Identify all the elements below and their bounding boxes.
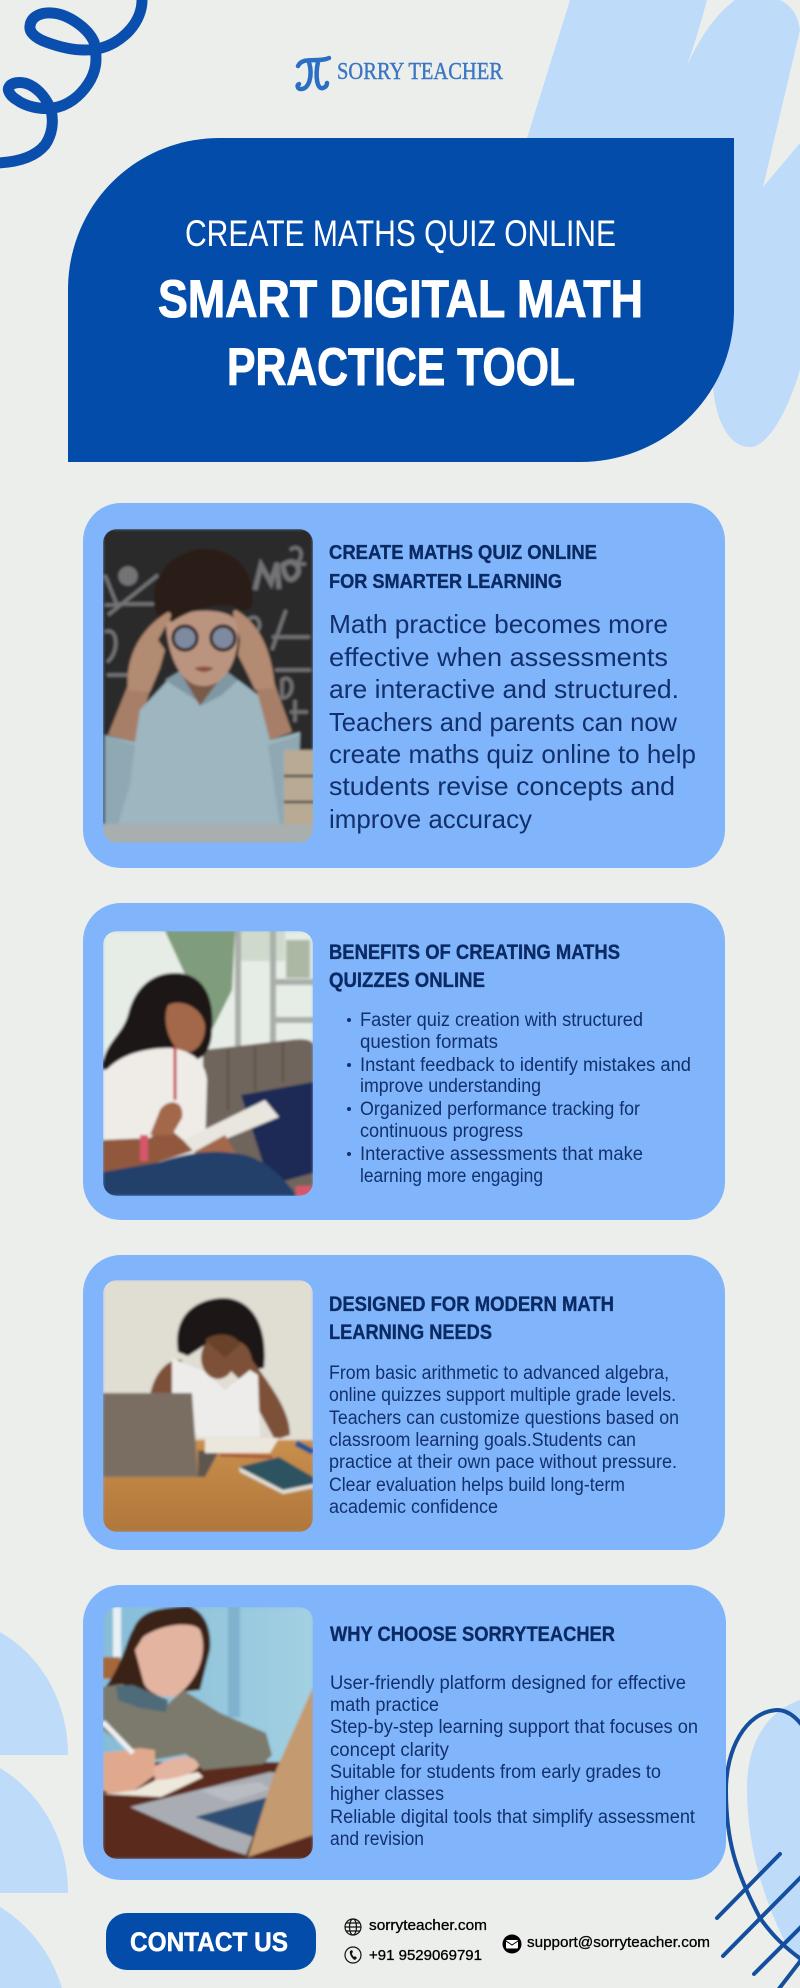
- plant: [165, 931, 235, 1030]
- body text: Math practice becomes more: [329, 609, 668, 639]
- icon: globe: [345, 1919, 361, 1935]
- bullet list: Faster quiz creation with structured: [360, 1010, 643, 1031]
- jeans: [103, 1152, 297, 1196]
- body text: [329, 1363, 679, 1518]
- heading: [329, 1293, 614, 1344]
- hands: [128, 612, 171, 692]
- hero title: PRACTICE TOOL: [227, 338, 575, 397]
- hair: [177, 1298, 265, 1372]
- email: support@sorryteacher.com: [527, 1934, 710, 1951]
- body text: online quizzes support multiple grade levels.: [329, 1385, 676, 1406]
- paper: [103, 1772, 203, 1797]
- laptop: [130, 1772, 277, 1855]
- window frame: [238, 931, 313, 1046]
- heading: [329, 941, 620, 992]
- body text: create maths quiz online to help: [329, 739, 696, 769]
- hands: [103, 1748, 155, 1794]
- contact button: CONTACT US: [130, 1927, 288, 1957]
- body text: Clear evaluation helps build long-term: [329, 1475, 625, 1496]
- icon: mail: [502, 1934, 522, 1954]
- bullet list: learning more engaging: [360, 1166, 543, 1187]
- notebook: [183, 1100, 279, 1152]
- logo wordmark: SORRY TEACHER: [337, 59, 503, 85]
- bullet list: [347, 1010, 691, 1187]
- body text: effective when assessments: [329, 642, 668, 672]
- panel: why choose sorryteacher: [83, 1585, 726, 1880]
- bullet list: Interactive assessments that make: [360, 1144, 643, 1165]
- body text: Teachers and parents can now: [329, 707, 677, 737]
- photo: girl with notebook: [103, 931, 313, 1196]
- heading: CREATE MATHS QUIZ ONLINE: [329, 542, 597, 564]
- body text: math practice: [330, 1695, 439, 1716]
- heading: DESIGNED FOR MODERN MATH: [329, 1293, 614, 1316]
- bullet list: Instant feedback to identify mistakes and: [360, 1055, 691, 1076]
- arms: [150, 1360, 182, 1400]
- website: sorryteacher.com: [369, 1917, 487, 1934]
- body text: [329, 609, 696, 834]
- table: [103, 1440, 313, 1532]
- neck: [182, 675, 218, 706]
- heading: QUIZZES ONLINE: [329, 969, 485, 992]
- hero subtitle: CREATE MATHS QUIZ ONLINE: [185, 213, 616, 254]
- photo: boy at chalkboard: [103, 529, 314, 843]
- hero banner: [68, 138, 734, 462]
- table: [103, 1762, 313, 1859]
- decorative shape: bottom right: [717, 1700, 800, 1988]
- icon: phone: [345, 1947, 361, 1963]
- body text: User-friendly platform designed for effective: [330, 1673, 686, 1694]
- bullet list: Organized performance tracking for: [360, 1099, 641, 1120]
- body text: Teachers can customize questions based on: [329, 1408, 679, 1429]
- pillow: [241, 1082, 313, 1185]
- books: [284, 750, 314, 828]
- screen back: [248, 1687, 313, 1857]
- body text: improve accuracy: [329, 804, 532, 834]
- body text: concept clarity: [330, 1740, 449, 1761]
- logo icon: pi: [298, 58, 329, 89]
- arm: [103, 1131, 194, 1174]
- chalk formulas: [105, 548, 311, 722]
- face: [201, 1337, 235, 1379]
- heading: BENEFITS OF CREATING MATHS: [329, 941, 620, 964]
- contact button: [106, 1913, 316, 1970]
- bullet list: question formats: [360, 1032, 498, 1053]
- heading: LEARNING NEEDS: [329, 1321, 492, 1344]
- hero title: SMART DIGITAL MATH: [158, 270, 643, 329]
- heading: FOR SMARTER LEARNING: [329, 571, 562, 593]
- logo: [298, 58, 503, 89]
- top: [105, 1045, 209, 1138]
- photo: student at laptop: [103, 1280, 313, 1532]
- body text: Suitable for students from early grades to: [330, 1762, 661, 1783]
- sofa: [203, 1039, 313, 1196]
- body text: are interactive and structured.: [329, 674, 679, 704]
- glasses: [173, 626, 235, 650]
- heading: WHY CHOOSE SORRYTEACHER: [330, 1623, 615, 1646]
- body text: [330, 1673, 698, 1850]
- body text: practice at their own pace without pressure.: [329, 1452, 677, 1473]
- sweater: [103, 1684, 272, 1770]
- hero title: [158, 270, 643, 397]
- body text: From basic arithmetic to advanced algebra,: [329, 1363, 669, 1384]
- hair: [103, 1607, 210, 1695]
- notebook: [205, 1438, 279, 1453]
- face: [135, 1625, 203, 1697]
- body text: higher classes: [330, 1784, 444, 1805]
- shirt: [105, 680, 300, 825]
- bullet list: improve understanding: [360, 1076, 541, 1097]
- photo: girl writing: [103, 1607, 313, 1859]
- decorative spiral: top left: [0, 0, 142, 163]
- laptop: [103, 1393, 198, 1477]
- pen: [296, 1443, 313, 1452]
- pen: [103, 1722, 133, 1753]
- body text: and revision: [330, 1829, 424, 1850]
- top: [172, 1358, 260, 1437]
- decorative blob: top right: [527, 0, 800, 447]
- body text: classroom learning goals.Students can: [329, 1430, 636, 1451]
- body text: students revise concepts and: [329, 771, 675, 801]
- phone number: +91 9529069791: [369, 1947, 482, 1964]
- face: [166, 611, 238, 686]
- body text: Step-by-step learning support that focuses on: [330, 1717, 698, 1738]
- panel: designed for modern math: [83, 1255, 725, 1550]
- heading: [329, 542, 597, 593]
- hair: [154, 549, 253, 622]
- chair: [103, 1657, 120, 1679]
- bullet list: continuous progress: [360, 1121, 523, 1142]
- forearms: [108, 685, 150, 742]
- body text: Reliable digital tools that simplify assessment: [330, 1807, 696, 1828]
- book: [239, 1457, 313, 1490]
- panel: benefits: [83, 903, 725, 1220]
- hair: [103, 973, 213, 1070]
- panel: create maths quiz: [83, 503, 725, 868]
- body text: academic confidence: [329, 1497, 498, 1518]
- turtleneck: [116, 1685, 168, 1712]
- pencil: [174, 1047, 176, 1100]
- decorative arcs: bottom left: [0, 1632, 68, 1988]
- table: [103, 824, 313, 843]
- face: [166, 1003, 205, 1052]
